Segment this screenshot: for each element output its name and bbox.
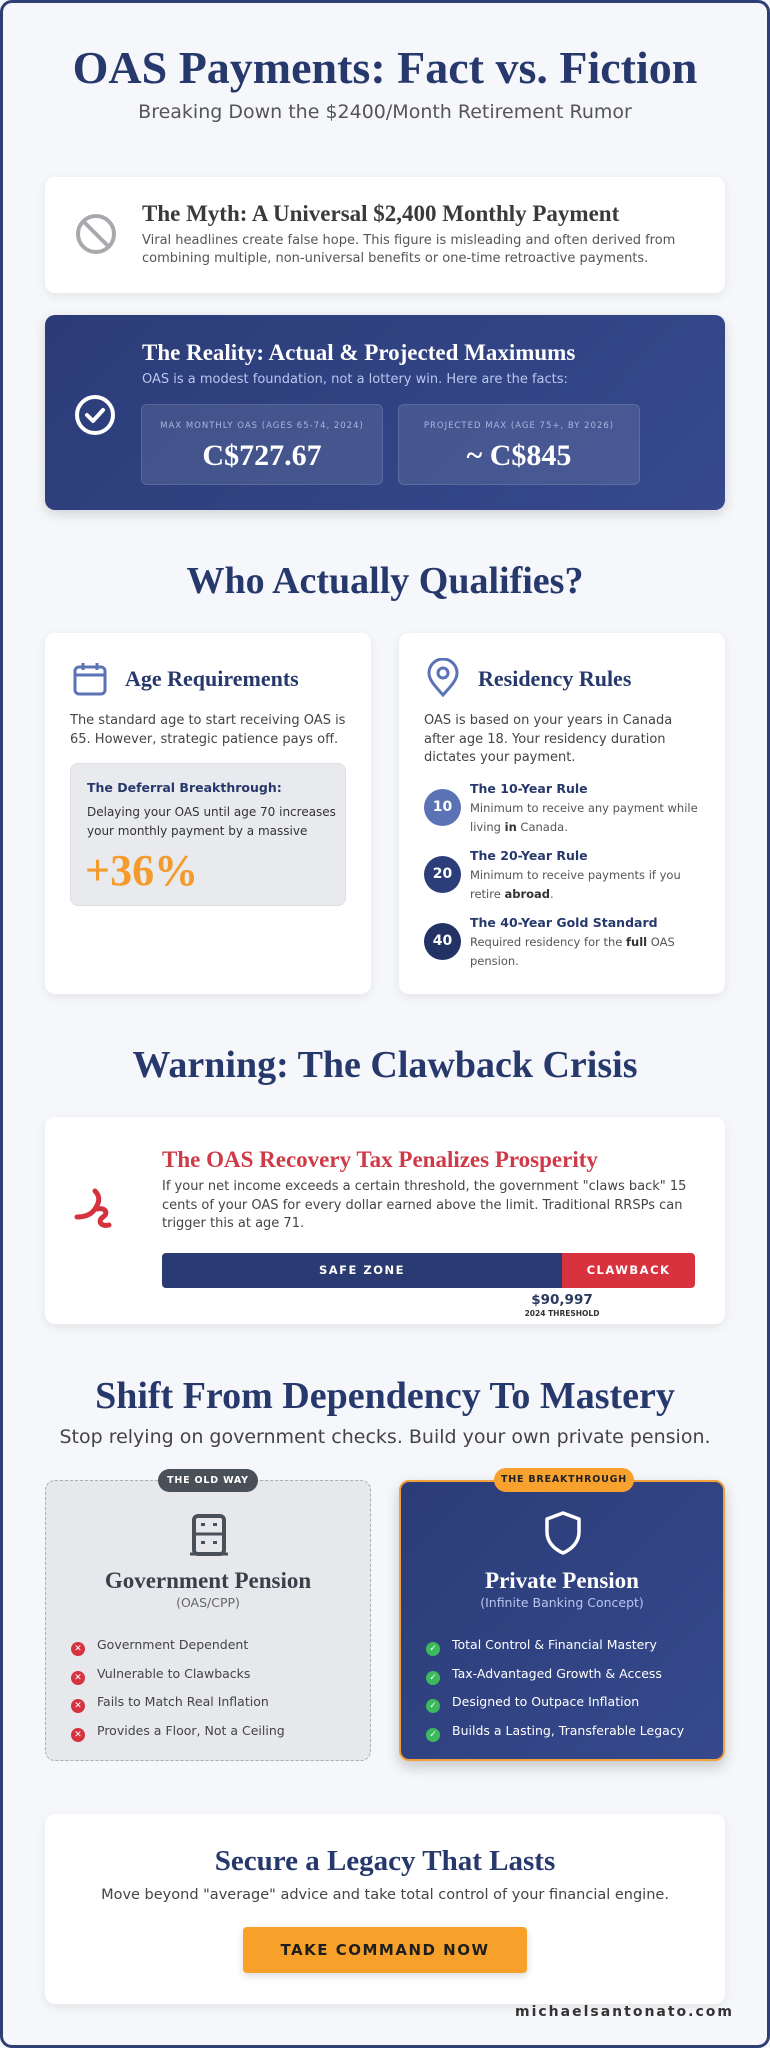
rule 10: 10: [433, 799, 452, 815]
cta button: TAKE COMMAND NOW: [280, 1941, 490, 1959]
list: pros: Builds a Lasting, Transferable Legacy: [452, 1722, 684, 1738]
stat: current max: C$727.67: [202, 439, 322, 472]
icon: location pin: [428, 658, 458, 698]
cta text: Move beyond "average" advice and take total control of your financial engine.: [101, 1887, 669, 1903]
age text: The standard age to start receiving OAS is 65. However, strategic patience pays off.: [70, 713, 345, 746]
rule 10: The 10-Year Rule: [470, 781, 588, 796]
private subtitle: (Infinite Banking Concept): [480, 1595, 644, 1610]
rule 20: Minimum to receive payments if you retire abroad.: [470, 868, 681, 900]
icon: calendar: [74, 663, 106, 696]
private title: Private Pension: [485, 1568, 639, 1593]
badge: old way: [158, 1469, 258, 1492]
icon: prohibited: [76, 214, 116, 254]
panel: clawback: [45, 1117, 725, 1324]
panel: residency rules: [399, 633, 725, 994]
list: pros: ✓: [429, 1672, 437, 1682]
icon: shield: [545, 1511, 581, 1555]
list: cons: Vulnerable to Clawbacks: [97, 1666, 250, 1680]
panel: myth: [45, 177, 725, 293]
stat: projected max: [398, 404, 640, 485]
clawback text: If your net income exceeds a certain threshold, the government "claws back" 15 cents of your OAS for every dollar earned above the limit. Traditional RRSPs can trigger this at age 71.: [162, 1179, 686, 1231]
footer: website: michaelsantonato.com: [515, 2004, 734, 2020]
badge: old way: THE OLD WAY: [167, 1475, 249, 1486]
list: pros: Total Control & Financial Mastery: [452, 1637, 657, 1652]
reality heading: The Reality: Actual & Projected Maximums: [142, 340, 575, 365]
residency heading: Residency Rules: [478, 666, 631, 691]
heading: clawback: Warning: The Clawback Crisis: [132, 1044, 637, 1086]
panel: government pension: [45, 1480, 371, 1761]
panel: call to action: [45, 1814, 725, 2004]
cta button: [243, 1927, 527, 1973]
rule 20: [424, 848, 681, 900]
deferral box: [70, 763, 346, 906]
deferral box: +36%: [85, 846, 198, 895]
list: pros: ✓: [429, 1644, 437, 1654]
list: cons: Fails to Match Real Inflation: [97, 1694, 269, 1709]
myth text: Viral headlines create false hope. This figure is misleading and often derived from combining multiple, non-universal benefits or one-time retroactive payments.: [142, 233, 675, 266]
list: cons: ✕: [74, 1672, 82, 1682]
rule 40: [424, 915, 675, 968]
rule 10: Minimum to receive any payment while living in Canada.: [470, 801, 698, 834]
heading: who qualifies: Who Actually Qualifies?: [187, 560, 583, 602]
stat: current max: MAX MONTHLY OAS (AGES 65-74, 2024): [160, 421, 364, 431]
gov subtitle: (OAS/CPP): [176, 1595, 240, 1610]
icon: building: [190, 1514, 228, 1556]
panel: age requirements: [45, 633, 371, 994]
deferral box: Delaying your OAS until age 70 increases your monthly payment by a massive: [87, 805, 336, 838]
rule 20: 20: [433, 866, 452, 882]
rule 20: The 20-Year Rule: [470, 848, 588, 863]
badge: breakthrough: [494, 1468, 634, 1492]
stat: projected max: PROJECTED MAX (AGE 75+, BY 2026): [424, 421, 614, 431]
panel: private pension: [399, 1480, 725, 1761]
bar chart: threshold: $90,997: [531, 1292, 593, 1308]
gov title: Government Pension: [105, 1568, 311, 1593]
list: pros: Tax-Advantaged Growth & Access: [452, 1666, 662, 1680]
heading: shift: Shift From Dependency To Mastery: [95, 1375, 675, 1417]
shift subtitle: Stop relying on government checks. Build your own private pension.: [59, 1426, 711, 1448]
list: cons: ✕: [74, 1701, 82, 1711]
list: pros: [426, 1637, 684, 1742]
rule 40: Required residency for the full OAS pension.: [470, 935, 675, 968]
list: pros: ✓: [429, 1701, 437, 1711]
list: cons: [71, 1637, 285, 1742]
panel: reality: [45, 315, 725, 510]
bar chart: threshold: [162, 1253, 695, 1318]
list: pros: Designed to Outpace Inflation: [452, 1694, 639, 1709]
bar chart: threshold: 2024 THRESHOLD: [525, 1309, 599, 1318]
bar chart: threshold: SAFE ZONE: [319, 1263, 405, 1277]
stat: current max: [141, 404, 383, 485]
bar chart: threshold: CLAWBACK: [587, 1263, 670, 1277]
myth heading: The Myth: A Universal $2,400 Monthly Payment: [142, 201, 619, 226]
rule 40: 40: [433, 933, 452, 949]
badge: breakthrough: THE BREAKTHROUGH: [501, 1474, 627, 1485]
title: OAS Payments: Fact vs. Fiction: [73, 42, 697, 93]
list: cons: Provides a Floor, Not a Ceiling: [97, 1722, 285, 1738]
rule 40: The 40-Year Gold Standard: [470, 915, 658, 930]
stat: projected max: ~ C$845: [467, 439, 571, 472]
deferral box: The Deferral Breakthrough:: [87, 780, 282, 795]
icon: check circle: [75, 395, 115, 435]
subtitle: Breaking Down the $2400/Month Retirement Rumor: [138, 101, 632, 123]
cta heading: Secure a Legacy That Lasts: [215, 1845, 555, 1877]
icon: hook: [74, 1188, 112, 1228]
age heading: Age Requirements: [125, 666, 299, 691]
rule 10: [424, 781, 698, 834]
residency text: OAS is based on your years in Canada after age 18. Your residency duration dictates your payment.: [424, 713, 672, 765]
list: cons: ✕: [74, 1730, 82, 1740]
reality subtitle: OAS is a modest foundation, not a lottery win. Here are the facts:: [142, 372, 568, 387]
list: cons: Government Dependent: [97, 1637, 248, 1652]
clawback heading: The OAS Recovery Tax Penalizes Prosperity: [162, 1147, 598, 1172]
list: pros: ✓: [429, 1730, 437, 1740]
list: cons: ✕: [74, 1644, 82, 1654]
